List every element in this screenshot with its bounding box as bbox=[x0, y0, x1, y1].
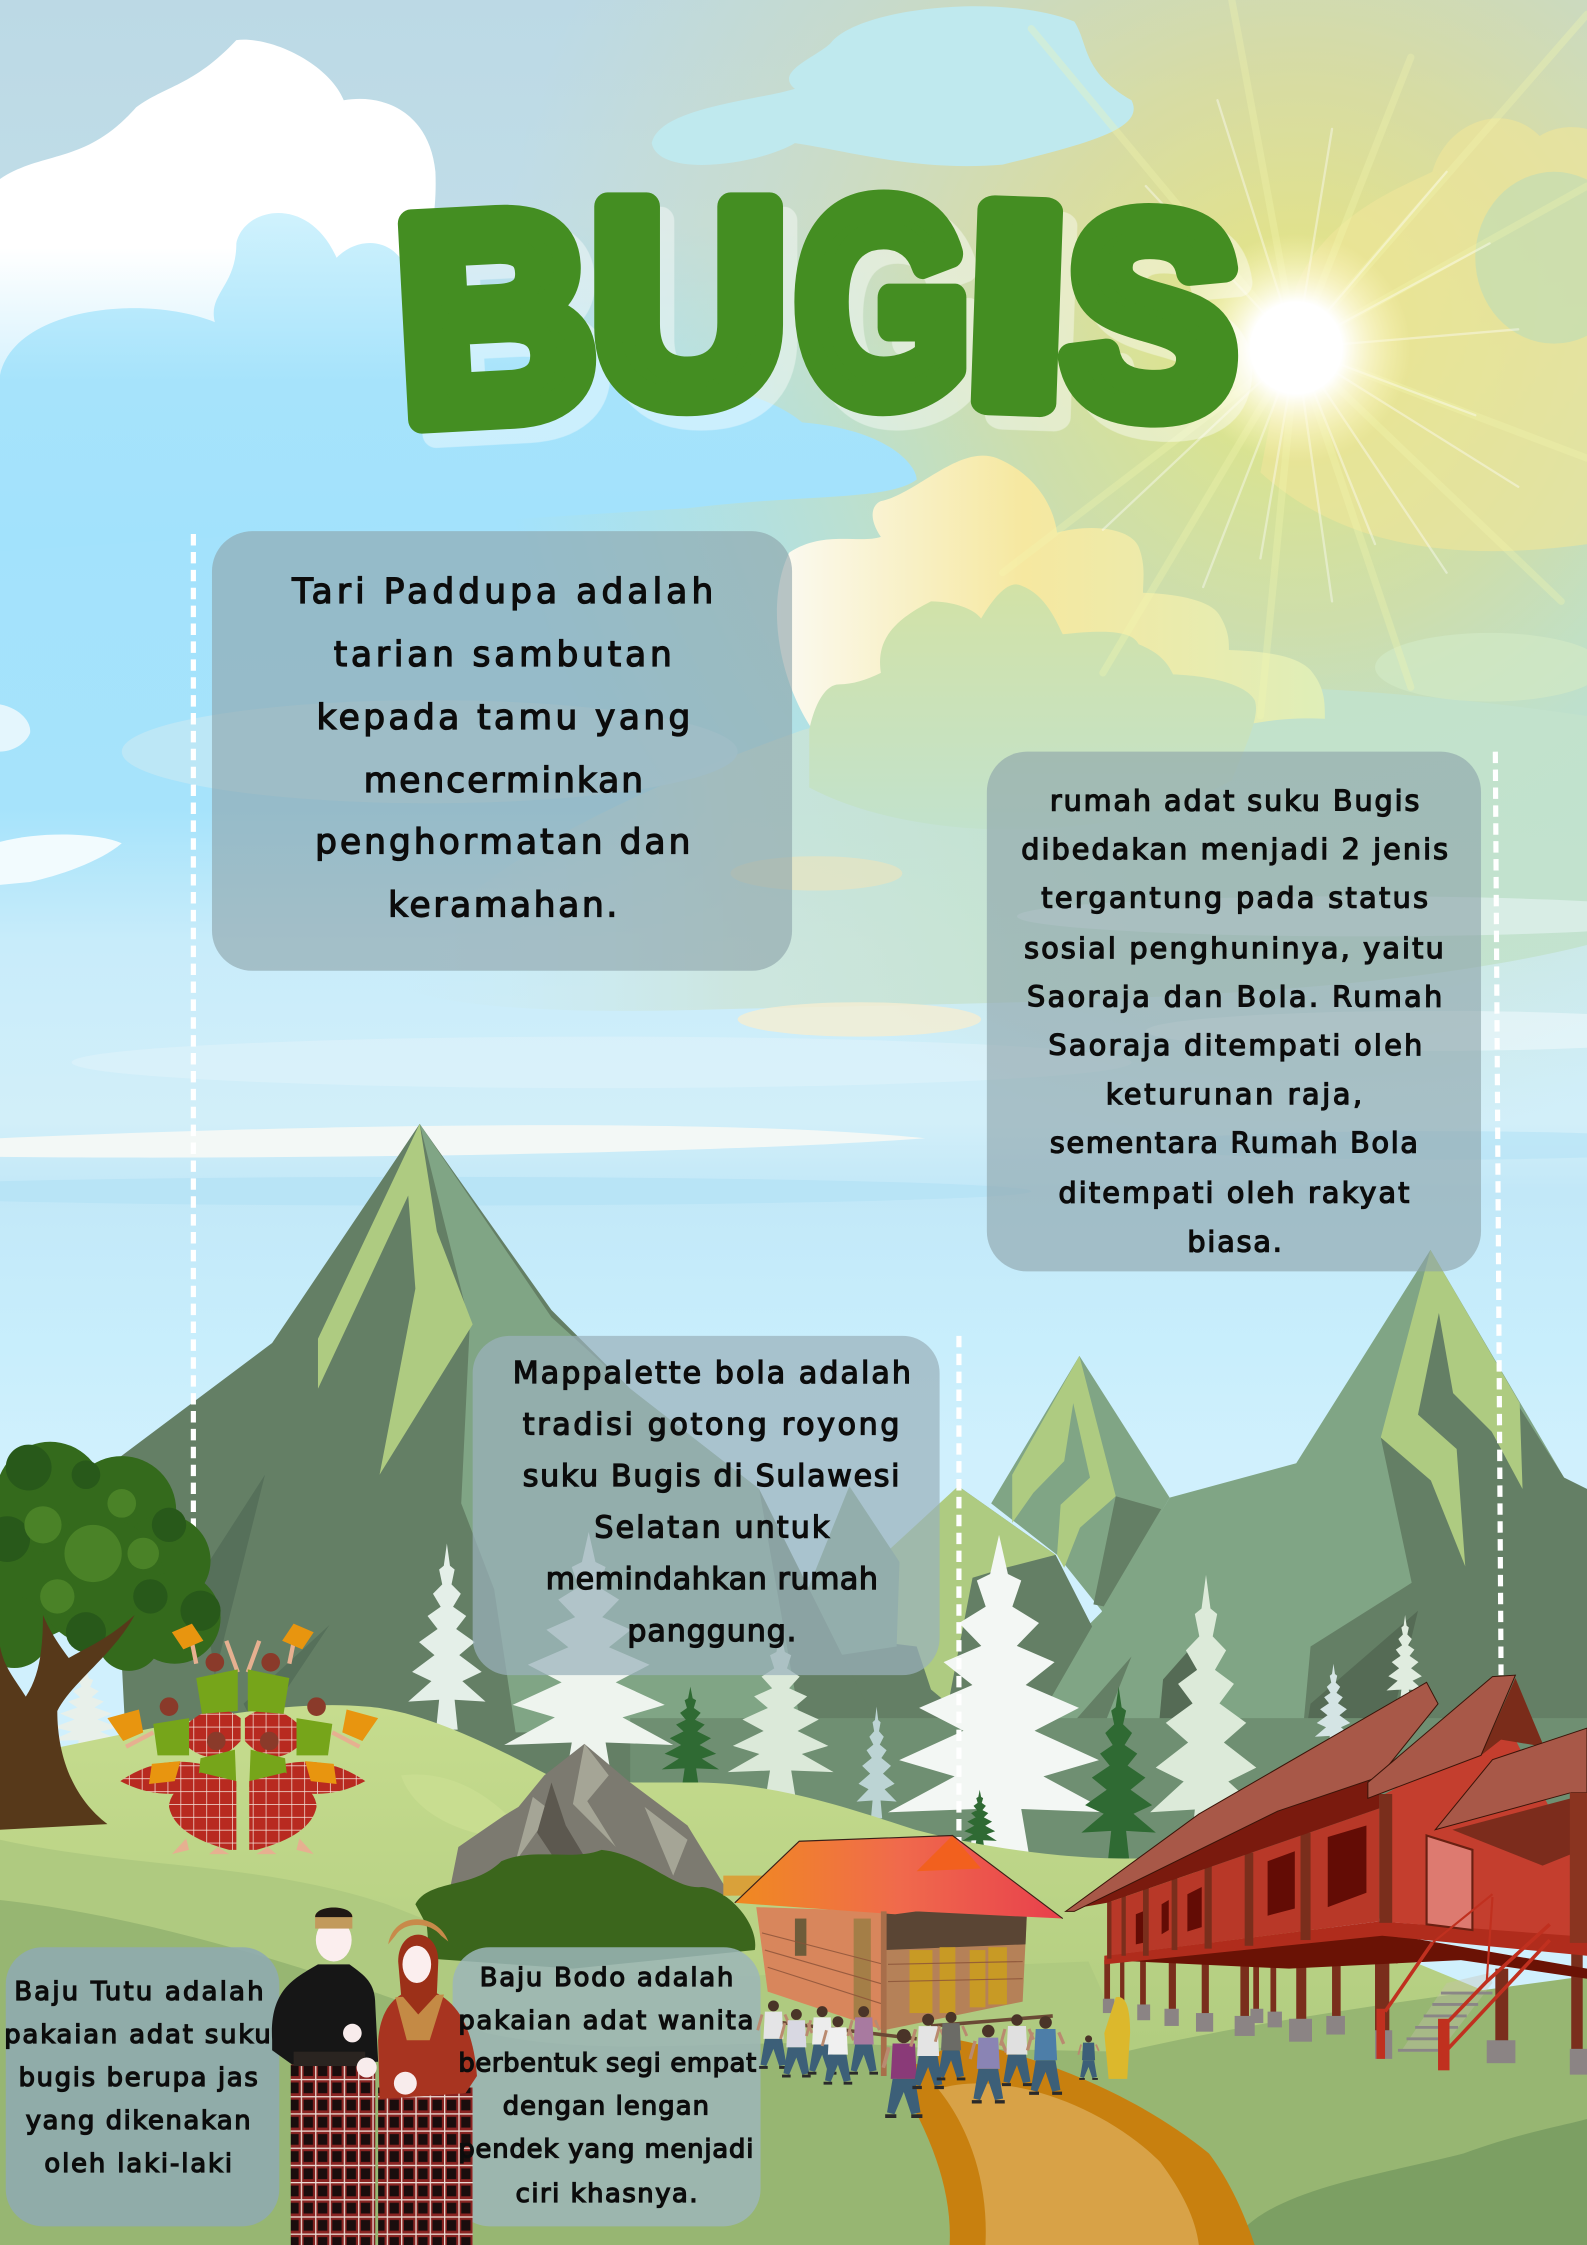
pine: tiny right bbox=[1386, 1615, 1424, 1704]
title: I bbox=[963, 149, 1071, 464]
stilts bbox=[1104, 1933, 1583, 2050]
dancers left half bbox=[107, 1624, 241, 1854]
pine: pale small left bbox=[408, 1543, 486, 1730]
cloud: cream centre bbox=[777, 456, 1325, 762]
mountain: far right bbox=[911, 1250, 1587, 1804]
wall: front bbox=[884, 1911, 1027, 2030]
orange ground patch behind house bbox=[723, 1876, 766, 1896]
floor band bbox=[1104, 1921, 1587, 1964]
mountain base filling behind the pines bbox=[630, 1718, 1587, 1919]
panel: rumah adat: Saoraja dan Bola. Rumah bbox=[1027, 980, 1442, 1014]
sun rays bbox=[1003, 0, 1587, 716]
crowd carrying the house bbox=[758, 1997, 1130, 2118]
cloud: yellow right bbox=[1260, 118, 1587, 551]
text: Baju Tutu: yang dikenakan bbox=[26, 2106, 251, 2136]
panel: rumah adat: tergantung pada status bbox=[1041, 881, 1428, 915]
text: Baju Bodo: dengan lengan bbox=[503, 2092, 709, 2122]
pine: green left bbox=[662, 1687, 719, 1784]
title: G bbox=[796, 145, 969, 459]
panel: rumah adat: rumah adat suku Bugis bbox=[1050, 783, 1419, 817]
pine: pale right bbox=[1150, 1575, 1262, 1854]
panel: Mappalette bola: Mappalette bola adalah bbox=[513, 1356, 911, 1391]
cloud: top centre bbox=[652, 6, 1134, 166]
wall: gable side bbox=[1379, 1728, 1571, 1936]
mountains bbox=[112, 1124, 1587, 1919]
cloud: teal right bbox=[1475, 172, 1587, 344]
old wooden house bbox=[735, 1836, 1063, 2076]
mountain: left peak bbox=[112, 1124, 917, 1804]
pink window bbox=[1427, 1836, 1472, 1930]
panel: Tari Paddupa: Tari Paddupa adalah bbox=[291, 572, 713, 612]
second roof bbox=[1368, 1675, 1515, 1798]
panel: rumah adat: biasa. bbox=[1187, 1224, 1282, 1258]
grey rock mountain bbox=[450, 1744, 730, 1896]
dashed line: middle bbox=[957, 1336, 961, 1847]
panel: Tari Paddupa: mencerminkan bbox=[364, 761, 643, 801]
front roof bbox=[1435, 1728, 1587, 1830]
wall: long side bbox=[1107, 1808, 1379, 1956]
pine: big pale behind box bbox=[504, 1532, 673, 1783]
panel: Mappalette bola bbox=[473, 1336, 940, 1675]
panel: Tari Paddupa: kepada tamu yang bbox=[317, 698, 690, 738]
roof bbox=[735, 1836, 1063, 1919]
panel: rumah adat: dibedakan menjadi 2 jenis bbox=[1021, 832, 1448, 866]
mountain: centre bbox=[759, 1486, 1092, 1804]
floor underside bbox=[1104, 1933, 1587, 1979]
pine: white behind tree bbox=[50, 1668, 122, 1754]
haze under the sun bbox=[401, 685, 1587, 1011]
text: Baju Bodo: berbentuk segi empat bbox=[458, 2049, 756, 2079]
mountain: small peak bbox=[991, 1356, 1170, 1612]
text: Baju Bodo: Baju Bodo adalah bbox=[480, 1963, 733, 1993]
title bbox=[390, 145, 1245, 481]
title: U bbox=[592, 146, 786, 460]
dashed line: left bbox=[192, 534, 195, 1632]
wall: left side bbox=[756, 1907, 885, 2030]
pine: blue grey bbox=[857, 1707, 897, 1818]
panel: Baju Bodo background bbox=[453, 1947, 761, 2226]
dark gable bbox=[1481, 1678, 1544, 1755]
text: Baju Tutu: oleh laki-laki bbox=[44, 2149, 232, 2179]
pine: big white bbox=[888, 1535, 1110, 1861]
doors bbox=[910, 1950, 932, 2013]
panel: rumah adat: keturunan raja, bbox=[1106, 1077, 1362, 1111]
panel: Mappalette bola: tradisi gotong royong bbox=[523, 1408, 899, 1443]
pine: green low bbox=[963, 1790, 997, 1850]
thin clouds bbox=[0, 633, 1587, 1206]
panel: Tari Paddupa: keramahan. bbox=[388, 885, 617, 925]
pine: small right bbox=[1315, 1664, 1352, 1750]
text: Baju Tutu bbox=[4, 1977, 271, 2179]
panel: Baju Tutu background bbox=[6, 1947, 279, 2226]
windows bbox=[1136, 1825, 1366, 1944]
panel: rumah adat: Saoraja ditempati oleh bbox=[1048, 1028, 1422, 1062]
text: Baju Tutu: Baju Tutu adalah bbox=[14, 1977, 264, 2007]
ground bbox=[0, 1705, 1587, 2245]
title: B bbox=[390, 153, 601, 481]
panel: Mappalette bola: suku Bugis di Sulawesi bbox=[523, 1459, 899, 1494]
panel: Tari Paddupa: penghormatan dan bbox=[315, 822, 690, 862]
dirt path bbox=[895, 2040, 1255, 2245]
stairs bbox=[1376, 1894, 1550, 2070]
soffit bbox=[1074, 1777, 1379, 1909]
text: Baju Tutu: pakaian adat suku bbox=[4, 2020, 271, 2050]
under front roof bbox=[1452, 1798, 1571, 1866]
figure: woman in traditional dress bbox=[378, 1919, 477, 2245]
panel: Mappalette bola: panggung. bbox=[627, 1614, 796, 1649]
sun bbox=[1182, 233, 1411, 462]
text: Baju Bodo: ciri khasnya. bbox=[516, 2179, 698, 2209]
cloud: white top left bbox=[0, 40, 436, 387]
panel: rumah adat: ditempati oleh rakyat bbox=[1058, 1176, 1409, 1210]
text: Baju Tutu: bugis berupa jas bbox=[19, 2063, 258, 2093]
panel: Tari Paddupa bbox=[212, 531, 792, 971]
dancers bbox=[107, 1624, 378, 1854]
text: Baju Bodo: pakaian adat wanita bbox=[458, 2006, 753, 2036]
main roof bbox=[1066, 1682, 1438, 1911]
panel: rumah adat: sementara Rumah Bola bbox=[1050, 1126, 1418, 1160]
footers bbox=[1103, 1999, 1587, 2075]
title: S bbox=[1057, 155, 1245, 474]
cloud: green centre bbox=[809, 584, 1256, 830]
panel: rumah adat: sosial penghuninya, yaitu bbox=[1024, 931, 1444, 965]
panel: Tari Paddupa: tarian sambutan bbox=[334, 635, 672, 675]
cloud: blue left bbox=[0, 213, 917, 551]
panel: Mappalette bola: memindahkan rumah bbox=[546, 1562, 878, 1597]
text: Baju Bodo: pendek yang menjadi bbox=[458, 2135, 753, 2165]
pine: green right bbox=[1081, 1687, 1156, 1858]
bush bbox=[415, 1850, 755, 1969]
big tree bbox=[0, 1442, 221, 1830]
panel: Mappalette bola: Selatan untuk bbox=[594, 1511, 830, 1546]
red stilt house bbox=[1066, 1675, 1587, 2075]
panel: rumah adat bbox=[987, 752, 1481, 1271]
snowy pines bbox=[50, 1532, 1424, 1861]
dancers right half bbox=[245, 1624, 378, 1854]
woman in yellow bbox=[1104, 1997, 1130, 2079]
figure: man in traditional dress bbox=[272, 1907, 378, 2245]
text: Baju Bodo bbox=[458, 1963, 756, 2209]
pine: pale centre bbox=[728, 1632, 834, 1797]
sun glow bbox=[0, 0, 1587, 1289]
posts bbox=[1107, 1794, 1392, 1959]
dashed line: right bbox=[1495, 752, 1501, 1675]
